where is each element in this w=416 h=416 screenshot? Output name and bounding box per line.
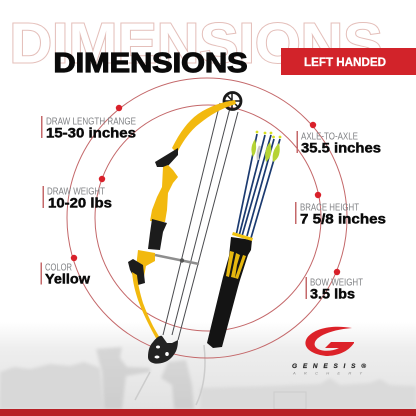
spec: bow weight: 3.5 lbs [310, 286, 355, 302]
bow strings [163, 103, 238, 340]
lower limb pocket [128, 259, 145, 285]
connector dots [71, 105, 340, 275]
spec: draw weight [42, 186, 112, 210]
logo mark [305, 327, 354, 356]
spec: axle-to-axle [296, 130, 381, 156]
icon: arrows [236, 131, 281, 238]
spec: bow weight [306, 276, 363, 302]
lower riser [136, 250, 155, 282]
grip [148, 219, 167, 250]
spec: axle-to-axle: AXLE-TO-AXLE [301, 130, 358, 142]
icon: compound bow [128, 92, 241, 364]
spec: draw length range: 15-30 inches [46, 124, 136, 140]
cam holes [154, 346, 169, 358]
spec: draw weight: 10-20 lbs [48, 194, 112, 210]
stabilizer rod [155, 255, 199, 264]
spec: brace height [295, 202, 386, 226]
badge: left handed: LEFT HANDED [304, 55, 386, 69]
lower cam wheel [148, 336, 178, 364]
logo: Genesis Archery [292, 327, 366, 376]
brand subtitle: ARCHERY [292, 370, 362, 376]
spec: draw length range [41, 116, 136, 140]
ghost outlined heading: DIMENSIONS [10, 12, 382, 76]
spec: axle-to-axle: 35.5 inches [301, 140, 381, 156]
background photo: foggy archery range [0, 322, 416, 410]
upper limb [172, 100, 236, 153]
spec: color: Yellow [45, 270, 90, 286]
brand name: GENESIS® [292, 362, 366, 370]
spec: color [40, 262, 90, 286]
limb pocket [155, 148, 178, 167]
riser [150, 165, 178, 222]
title: DIMENSIONS [54, 47, 248, 78]
icon: quiver [207, 232, 253, 348]
lower limb [132, 272, 168, 353]
badge: left handed [281, 48, 416, 75]
spec: draw weight: DRAW WEIGHT [47, 186, 105, 198]
spec: color: COLOR [45, 262, 72, 274]
upper cam wheel [224, 92, 241, 110]
spec: draw length range: DRAW LENGTH RANGE [46, 116, 136, 128]
spec: brace height: 7 5/8 inches [300, 210, 386, 226]
spec: bow weight: BOW WEIGHT [310, 276, 363, 288]
concentric target rings [67, 78, 347, 358]
spec: brace height: BRACE HEIGHT [300, 202, 359, 214]
bottom red band [0, 409, 416, 416]
